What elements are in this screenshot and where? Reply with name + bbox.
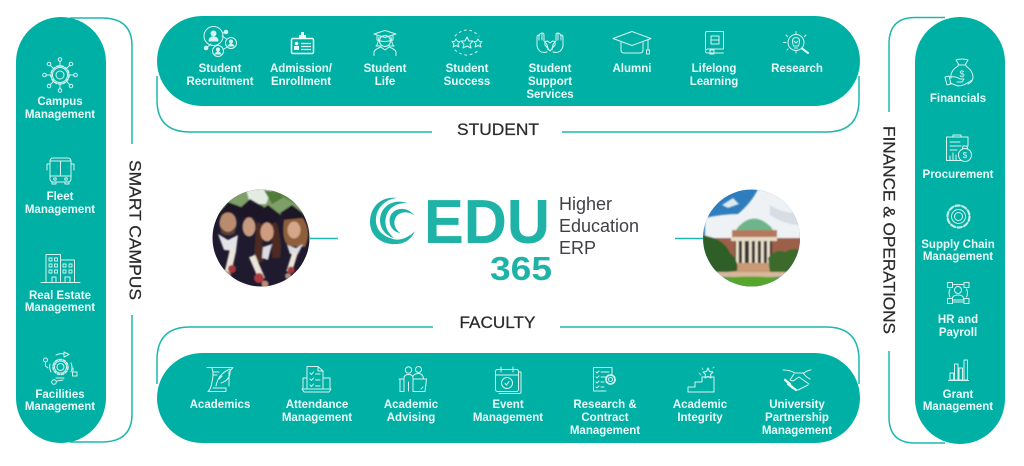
icon: academics scroll and quill [207,368,233,392]
label: student success: Student [446,63,489,75]
icon: research bulb magnifier [784,32,808,53]
logo: EDU wordmark: EDU [424,188,550,257]
logo: tagline: Education [559,216,639,236]
icon: supply chain gears [948,206,970,228]
label: campus management: Management [25,109,95,121]
outline: faculty bracket [157,327,859,384]
label: university partnership management: Management [762,425,832,437]
panel: faculty [157,314,860,443]
collars [218,234,238,251]
icon: grant bar chart [948,360,968,380]
icon: student life graduate [374,30,396,56]
panel: smart campus [16,17,144,443]
icon: attendance management [302,366,331,392]
icon: academic advising [399,366,426,392]
hair [254,222,281,262]
icon: admission id badge [292,32,314,54]
icon: academic integrity stairs [688,367,714,392]
label: academic advising: Advising [387,412,435,424]
icon: partnership handshake [783,370,811,390]
label: student life: Student [364,63,407,75]
icon: fleet bus [47,158,74,184]
label: academic integrity: Integrity [677,412,723,424]
label: university partnership management: Partnership [765,412,829,424]
label: facilities management: Facilities [35,389,85,401]
outline: finance bracket [889,18,945,443]
pill: finance [915,17,1005,444]
icon: student support hands [537,33,563,52]
icon: campus management [43,58,77,92]
label: facilities management: Management [25,401,95,413]
label: student support services: Student [529,63,572,75]
pill: smart campus [16,17,106,443]
heading: student: STUDENT [457,121,539,139]
label: student life: Life [375,76,395,88]
icon: event calendar [496,367,521,394]
label: event management: Management [473,412,543,424]
icon: student recruitment [204,26,236,56]
label: academics: Academics [190,399,250,411]
label: attendance management: Management [282,412,352,424]
outline: student bracket [157,76,859,132]
heading: smart campus: SMART CAMPUS [126,160,144,300]
label: procurement: Procurement [923,169,994,181]
label: event management: Event [492,399,524,411]
label: real estate management: Real Estate [29,290,91,302]
icon: lifelong learning book [706,32,724,54]
panel: student [157,16,860,139]
label: research and contract management: Management [570,425,640,437]
icon: procurement clipboard: $ [963,151,968,160]
label: attendance management: Attendance [286,399,348,411]
icon: student success stars [452,30,482,55]
icon: facilities gear [44,352,77,384]
photo: campus building [703,189,801,290]
label: hr and payroll: HR and [938,314,978,326]
photo: graduates [212,189,310,288]
label: supply chain management: Supply Chain [921,239,995,251]
label: admission enrollment: Enrollment [271,76,331,88]
icon: alumni cap [613,32,651,54]
icon: hr and payroll [948,282,969,304]
label: hr and payroll: Payroll [939,327,977,339]
label: research and contract management: Research & [573,399,637,411]
heading: finance and operations: FINANCE & OPERATIONS [880,126,898,334]
label: academic integrity: Academic [673,399,728,411]
faces [220,212,236,234]
pill: student [157,16,860,106]
label: admission enrollment: Admission/ [270,63,333,75]
outline: smart campus bracket [70,18,132,442]
label: academic advising: Academic [384,399,439,411]
logo: tagline: ERP [559,238,596,258]
icon: financials money bag: $ [959,69,965,79]
label: real estate management: Management [25,302,95,314]
caps [216,202,244,218]
label: research and contract management: Contract [581,412,629,424]
logo: tagline: Higher [559,194,612,214]
label: campus management: Campus [37,96,83,108]
center: logo and photos [212,188,801,290]
logo: swirl [370,198,415,244]
label: lifelong learning: Learning [690,76,738,88]
label: grant management: Grant [943,389,974,401]
connector: left [310,238,338,240]
label: alumni: Alumni [613,63,651,75]
icon: research and contract document [594,368,615,391]
label: student success: Success [444,76,490,88]
pill: faculty [157,353,860,443]
icon: real estate buildings [41,254,80,282]
diplomas [228,250,233,272]
label: supply chain management: Management [923,251,993,263]
label: student recruitment: Student [199,63,242,75]
label: university partnership management: University [769,399,825,411]
label: fleet management: Management [25,204,95,216]
label: research: Research [771,63,823,75]
label: grant management: Management [923,401,993,413]
logo: 365: 365 [490,250,552,287]
label: student support services: Services [526,89,574,101]
label: student support services: Support [528,76,572,88]
icon: procurement clipboard [946,135,972,162]
connector: right [675,238,703,240]
label: financials: Financials [930,93,986,105]
label: lifelong learning: Lifelong [692,63,736,75]
label: student recruitment: Recruitment [186,76,254,88]
label: fleet management: Fleet [47,191,74,203]
panel: finance and operations [880,17,1005,444]
heading: faculty: FACULTY [460,314,536,332]
icon: financials money bag [945,59,973,86]
